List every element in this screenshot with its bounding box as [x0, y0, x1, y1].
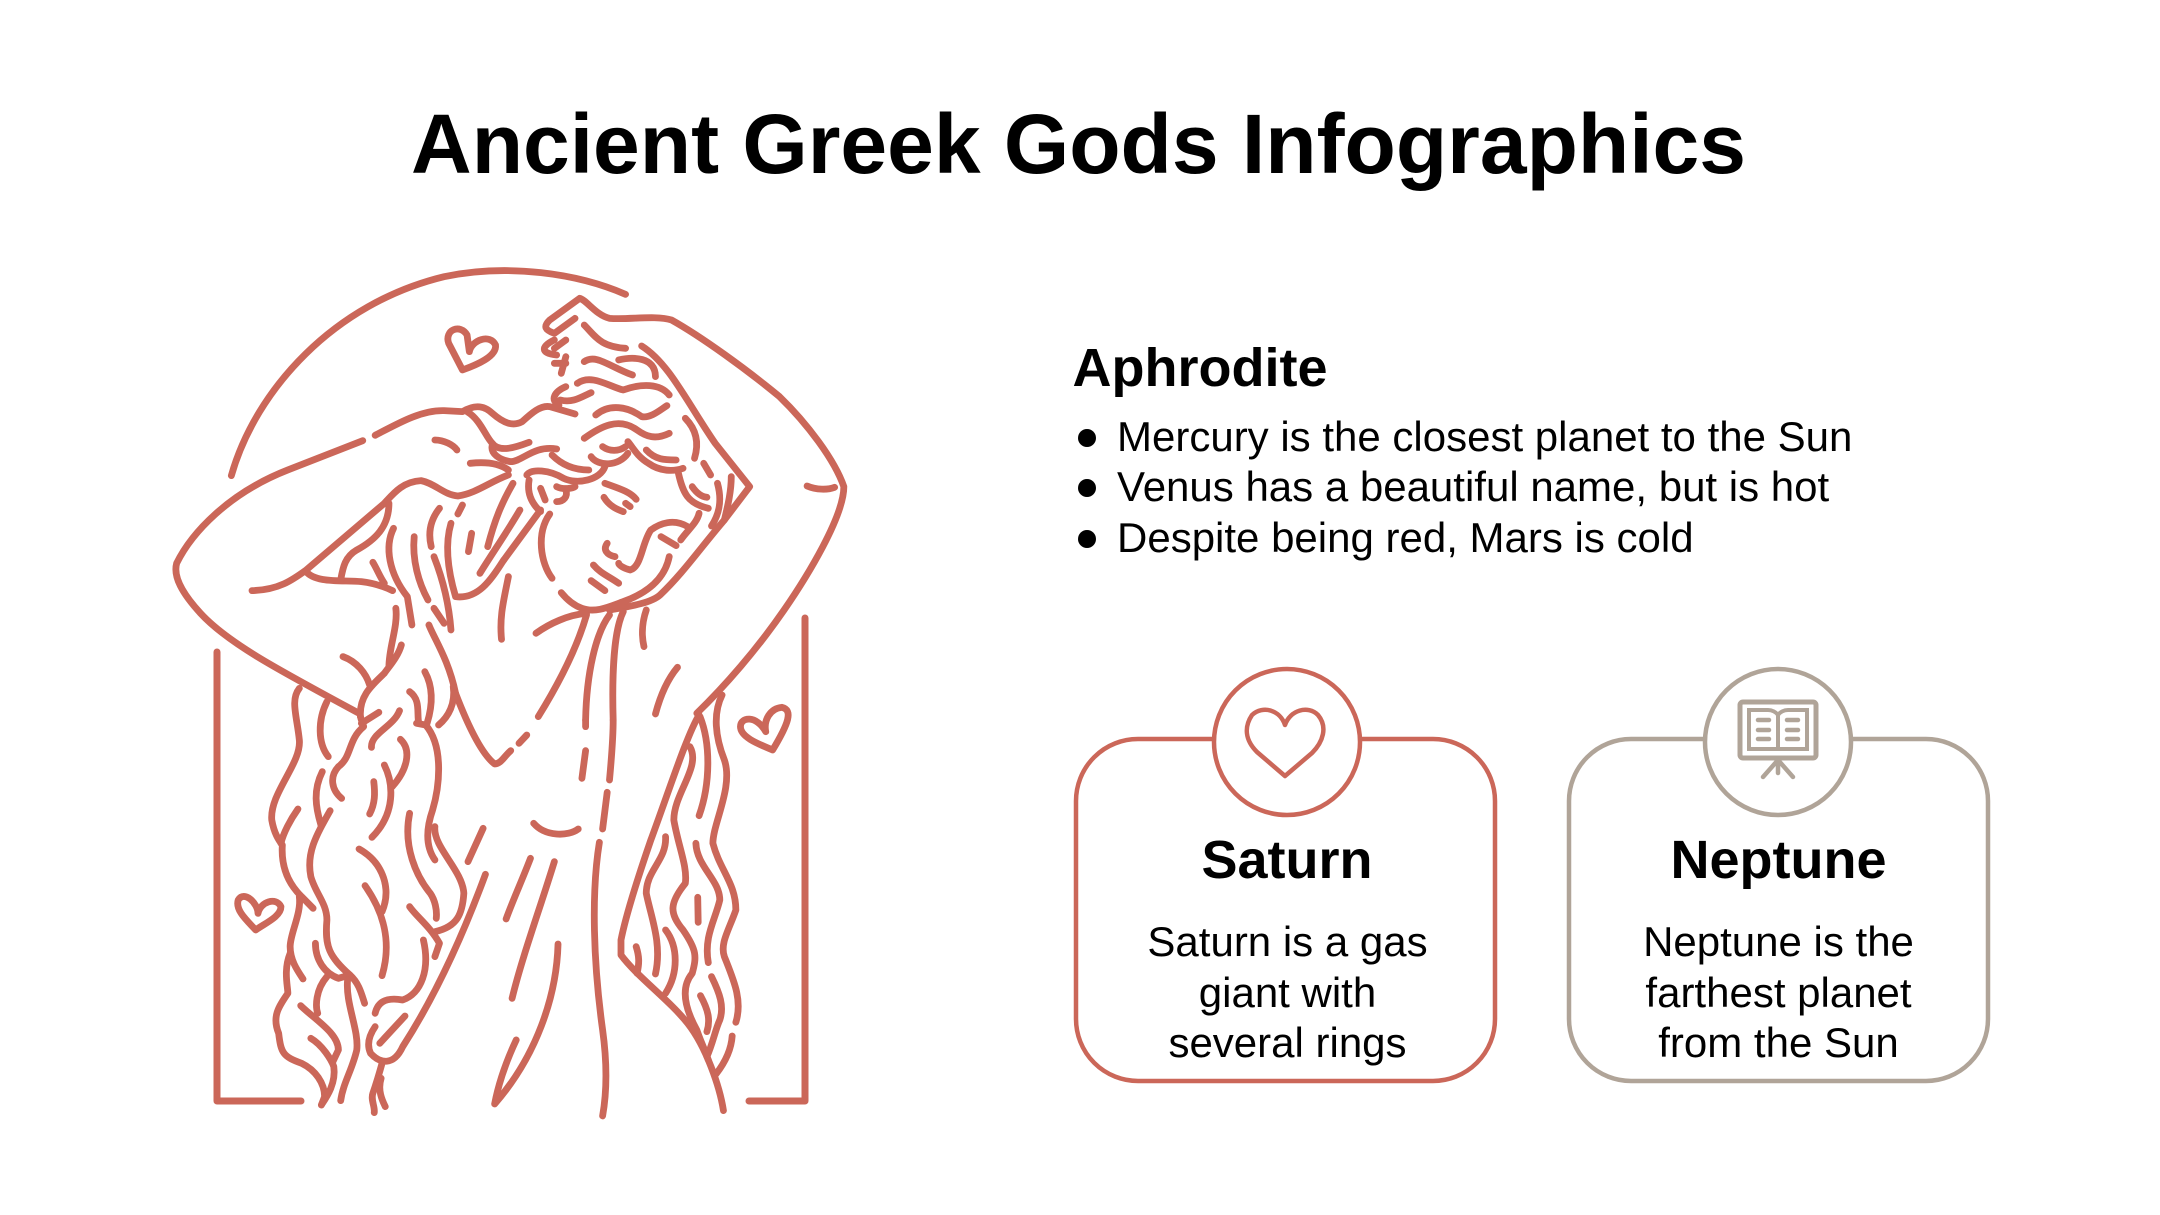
bullet list: [1078, 412, 1852, 560]
arch frame: [217, 271, 805, 1101]
Neptune text: Neptune is the: [1643, 918, 1914, 965]
Saturn heading: Saturn: [1201, 830, 1373, 890]
Saturn text: several rings: [1168, 1019, 1407, 1066]
bullet 2: Venus has a beautiful name, but is hot: [1117, 463, 1829, 510]
Neptune text: from the Sun: [1658, 1019, 1899, 1066]
hair curls: [584, 325, 626, 348]
icon: small hearts: [238, 329, 788, 930]
heading: Aphrodite: Aphrodite: [1072, 338, 1327, 398]
figure: head and arms: [176, 298, 844, 720]
face: [605, 483, 636, 499]
Saturn text: Saturn is a gas: [1147, 918, 1428, 965]
Saturn text: giant with: [1199, 968, 1376, 1016]
Neptune heading: Neptune: [1670, 830, 1886, 890]
Neptune text: [1643, 918, 1914, 1066]
figure: torso and flowing hair: [272, 672, 738, 1116]
icon: heart in circle: [1214, 669, 1360, 815]
title: Ancient Greek Gods Infographics: [411, 97, 1746, 191]
Saturn text: [1147, 918, 1428, 1066]
icon: open book on easel in circle: [1705, 669, 1851, 815]
hair beside arm: [504, 510, 541, 560]
neck and shoulders: [536, 613, 587, 633]
bullet 1: Mercury is the closest planet to the Sun: [1117, 412, 1852, 460]
bullet 3: Despite being red, Mars is cold: [1117, 514, 1694, 560]
Neptune text: farthest planet: [1645, 968, 1912, 1016]
